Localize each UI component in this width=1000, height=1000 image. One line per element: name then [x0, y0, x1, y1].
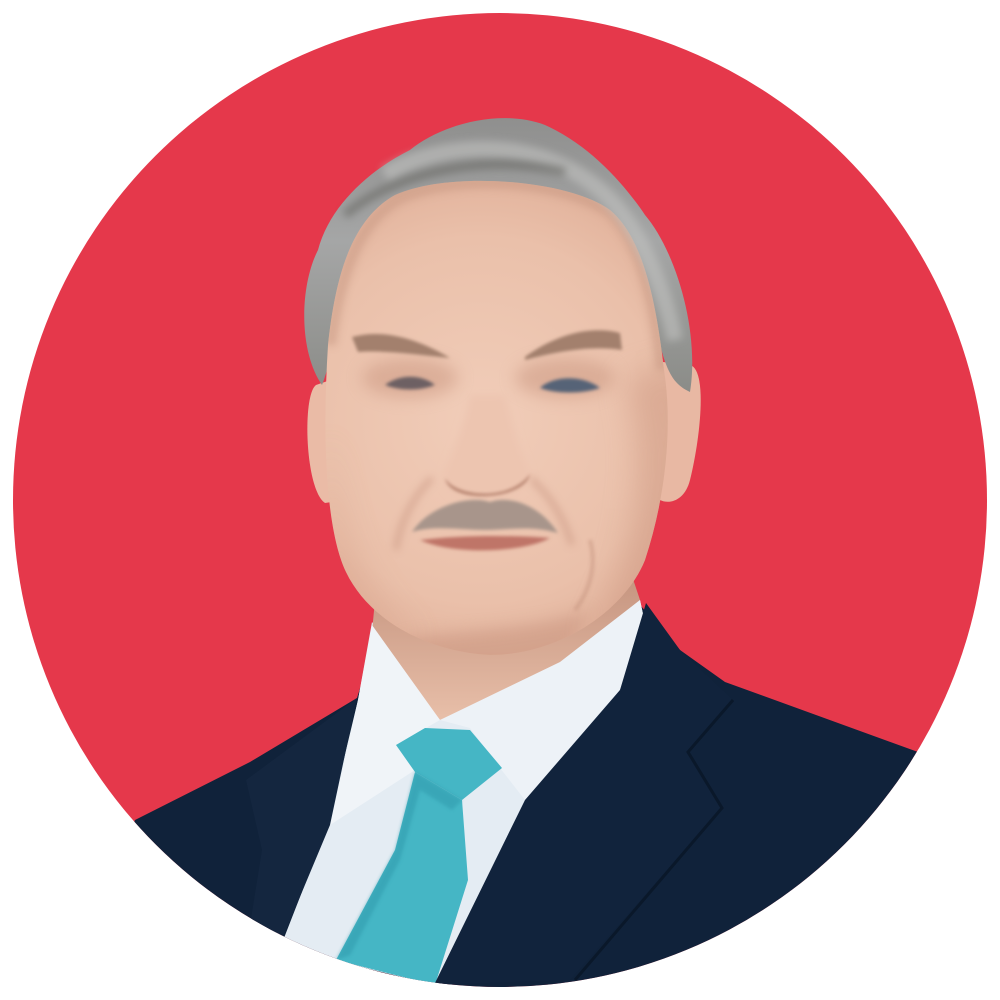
- right smile line: [530, 478, 572, 545]
- chin shading: [416, 613, 584, 655]
- shirt collar right: [440, 600, 646, 800]
- right ear: [660, 362, 701, 502]
- left lapel: [246, 698, 357, 935]
- nose shadow: [445, 474, 530, 496]
- neck: [372, 581, 640, 720]
- suit jacket: [134, 606, 917, 987]
- right lapel: [435, 603, 681, 984]
- right eye: [540, 378, 600, 392]
- right eyebrow: [525, 330, 622, 360]
- shirt body: [284, 600, 646, 985]
- hair: [304, 118, 692, 392]
- left ear: [307, 382, 330, 503]
- right cheek shading: [604, 366, 668, 612]
- nose: [470, 409, 491, 432]
- tie knot: [396, 728, 502, 800]
- left eye: [385, 377, 435, 390]
- right eye socket: [515, 358, 615, 398]
- left smile line: [396, 478, 432, 550]
- figure: [134, 118, 917, 987]
- hair highlights: [385, 149, 675, 340]
- mouth: [420, 536, 550, 550]
- face shading: [328, 181, 668, 655]
- left eyebrow: [352, 334, 450, 358]
- right wrinkles: [575, 540, 593, 610]
- tie blade: [336, 772, 468, 985]
- left cheek shading: [334, 530, 378, 612]
- moustache: [412, 500, 558, 533]
- lapel crease: [575, 700, 733, 980]
- face: [325, 181, 668, 655]
- hair shadow: [345, 164, 565, 215]
- left eye socket: [362, 358, 458, 398]
- tie shade: [336, 772, 462, 960]
- shirt collar left: [330, 625, 440, 825]
- hairline shadow: [330, 182, 662, 370]
